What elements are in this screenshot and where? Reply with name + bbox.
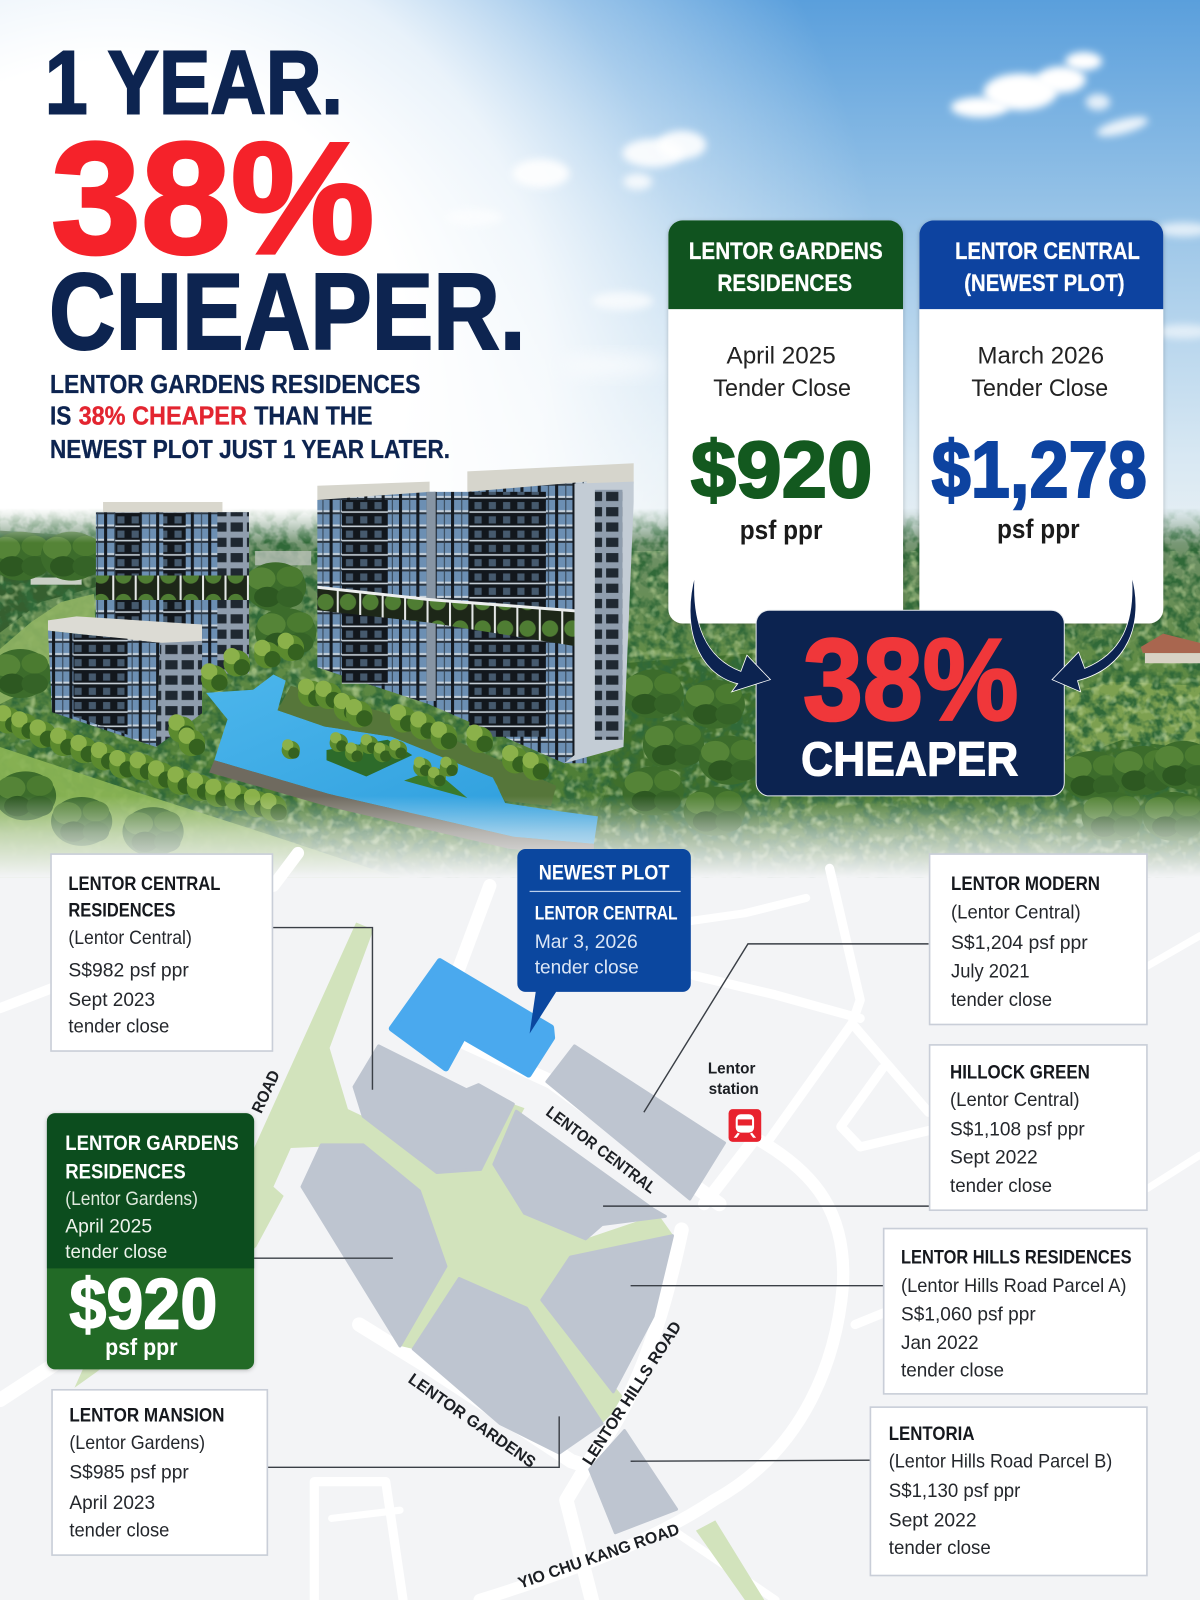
icon: train — [729, 1109, 761, 1142]
callout: Lentoria — [870, 1407, 1147, 1576]
panel: Lentor Gardens Residences price card: Tender Close — [713, 375, 851, 402]
subheading: IS — [50, 402, 71, 430]
headline — [45, 33, 526, 372]
panel: Lentor Gardens Residences price card: LENTOR GARDENS — [689, 238, 883, 265]
callout: newest plot: Mar 3, 2026 — [535, 931, 638, 953]
road label: Road: ROAD — [249, 1067, 284, 1116]
road label: Lentor Central: LENTOR CENTRAL — [542, 1103, 659, 1197]
callout: Hillock Green: HILLOCK GREEN — [950, 1062, 1090, 1084]
panel: Lentor Gardens Residences price card: $920 — [691, 425, 872, 514]
callout: Hillock Green: Sept 2022 — [950, 1146, 1038, 1168]
callout: Hillock Green: tender close — [950, 1175, 1052, 1197]
callout: Lentor Gardens Residences highlighted: psf ppr — [105, 1334, 178, 1360]
callout: Lentor Gardens Residences highlighted: April 2025 — [65, 1216, 152, 1238]
callout: Lentor Modern — [930, 854, 1147, 1024]
callout: Lentor Central Residences — [51, 854, 272, 1051]
arrow: right card to badge — [1052, 576, 1136, 692]
headline line: 1 YEAR.: 1 YEAR. — [45, 33, 343, 133]
callout: Lentoria: tender close — [889, 1537, 991, 1559]
callout: Lentoria: (Lentor Hills Road Parcel B) — [889, 1450, 1112, 1472]
podium wall and driveway — [209, 760, 594, 855]
background: aerial landscape — [0, 505, 1200, 888]
callout: Lentor Mansion: S$985 psf ppr — [69, 1462, 189, 1484]
callout: Lentor Gardens Residences highlighted: $920 — [69, 1265, 217, 1345]
callout: Lentor Hills Residences: tender close — [901, 1360, 1004, 1382]
callout: newest plot: NEWEST PLOT — [539, 861, 669, 885]
headline line: 38%: 38% — [51, 109, 374, 287]
subheading — [50, 371, 450, 464]
callout: Lentor Modern: LENTOR MODERN — [951, 873, 1100, 895]
subheading: 38% CHEAPER — [79, 402, 247, 430]
subheading: NEWEST PLOT JUST 1 YEAR LATER. — [50, 436, 450, 464]
callout: Lentor Hills Residences: S$1,060 psf ppr — [901, 1303, 1036, 1325]
building: front low block — [48, 616, 202, 747]
illustration: condominium development — [0, 463, 634, 855]
road label: Lentor Gardens: LENTOR GARDENS — [405, 1370, 539, 1472]
arrow: left card to badge — [690, 576, 770, 692]
callout: Lentoria: LENTORIA — [889, 1423, 974, 1445]
map: development plots — [302, 1046, 724, 1533]
garden islands and trees — [0, 633, 556, 821]
station marker: Lentor station — [708, 1060, 761, 1142]
callout: Lentor Mansion: (Lentor Gardens) — [69, 1432, 205, 1454]
callout: Lentor Hills Residences: (Lentor Hills Road Parcel A) — [901, 1275, 1127, 1297]
callout: Lentor Central Residences: (Lentor Central) — [68, 927, 192, 949]
callout: Hillock Green — [930, 1045, 1147, 1210]
panel: Lentor Central price card: March 2026 — [978, 342, 1104, 369]
panel: Lentor Gardens Residences price card — [668, 220, 903, 623]
callout: 38% cheaper badge: 38% — [803, 614, 1018, 744]
callout: Lentor Gardens Residences highlighted: RESIDENCES — [65, 1160, 186, 1184]
callout: newest plot: tender close — [535, 956, 639, 978]
background: sky with clouds — [0, 0, 1200, 571]
road label: Yio Chu Kang Road: YIO CHU KANG ROAD — [516, 1520, 682, 1593]
panel: Lentor Central price card: psf ppr — [997, 514, 1080, 544]
callout: Lentoria: S$1,130 psf ppr — [889, 1480, 1021, 1502]
callout: Lentor Central Residences: tender close — [68, 1016, 169, 1038]
panel: Lentor Central price card — [919, 220, 1163, 623]
callout: Lentor Central Residences: S$982 psf ppr — [68, 960, 189, 982]
callout: 38% cheaper badge: CHEAPER — [801, 734, 1018, 787]
callout: 38% cheaper badge — [756, 610, 1064, 796]
panel: Lentor Gardens Residences price card: April 2025 — [727, 342, 836, 369]
leader lines — [254, 928, 930, 1467]
pool — [206, 674, 598, 844]
road label: Lentor Hills Road: LENTOR HILLS ROAD — [579, 1318, 685, 1469]
callout: Lentoria: Sept 2022 — [889, 1510, 977, 1532]
building: rear left tower — [96, 502, 249, 673]
callout: Lentor Modern: July 2021 — [951, 961, 1030, 983]
headline line: CHEAPER.: CHEAPER. — [49, 251, 526, 372]
map background — [0, 796, 1200, 1600]
callout: Lentor Mansion: April 2023 — [69, 1492, 155, 1514]
callout: Lentor Gardens Residences highlighted — [47, 1113, 254, 1369]
callout: Hillock Green: S$1,108 psf ppr — [950, 1119, 1085, 1141]
map: road network — [0, 853, 1200, 1600]
callout: Lentor Mansion: LENTOR MANSION — [69, 1404, 224, 1426]
panel: Lentor Central price card: LENTOR CENTRAL — [955, 238, 1140, 265]
callout: Lentor Mansion — [52, 1390, 267, 1555]
callout: Lentor Modern: tender close — [951, 989, 1052, 1011]
callout: Lentor Central Residences: LENTOR CENTRAL — [68, 873, 221, 895]
callout: Lentor Modern: S$1,204 psf ppr — [951, 932, 1088, 954]
map: road labels — [249, 1067, 685, 1593]
callout: Lentor Mansion: tender close — [69, 1520, 169, 1542]
callout: Lentor Hills Residences: Jan 2022 — [901, 1332, 979, 1354]
callout: Hillock Green: (Lentor Central) — [950, 1089, 1080, 1111]
callout: Lentor Modern: (Lentor Central) — [951, 901, 1081, 923]
map: green corridors — [74, 922, 764, 1600]
callout: Lentor Gardens Residences highlighted: tender close — [65, 1241, 167, 1263]
callout: Lentor Hills Residences: LENTOR HILLS RESIDENCES — [901, 1246, 1132, 1268]
subheading: THAN THE — [254, 402, 372, 430]
building: main twin towers — [317, 463, 634, 763]
panel: Lentor Gardens Residences price card: psf ppr — [740, 515, 822, 545]
station marker: Lentor station: station — [709, 1081, 759, 1098]
callout: Lentor Central Residences: Sept 2023 — [68, 989, 155, 1011]
map: highlighted newest plot — [392, 961, 552, 1074]
callout: Lentor Gardens Residences highlighted: (Lentor Gardens) — [65, 1188, 198, 1210]
panel: Lentor Central price card: Tender Close — [971, 375, 1108, 402]
callout: newest plot: LENTOR CENTRAL — [535, 902, 678, 924]
station marker: Lentor station: Lentor — [708, 1060, 755, 1077]
panel: Lentor Central price card: $1,278 — [932, 425, 1147, 514]
callout: Lentor Central Residences: RESIDENCES — [68, 899, 176, 921]
callout: Lentor Gardens Residences highlighted: LENTOR GARDENS — [65, 1131, 239, 1155]
panel: Lentor Central price card: (NEWEST PLOT) — [964, 270, 1124, 297]
subheading: LENTOR GARDENS RESIDENCES — [50, 371, 420, 399]
callout: Lentor Hills Residences — [884, 1229, 1147, 1394]
callout: newest plot — [517, 849, 691, 1034]
panel: Lentor Gardens Residences price card: RESIDENCES — [717, 270, 852, 297]
